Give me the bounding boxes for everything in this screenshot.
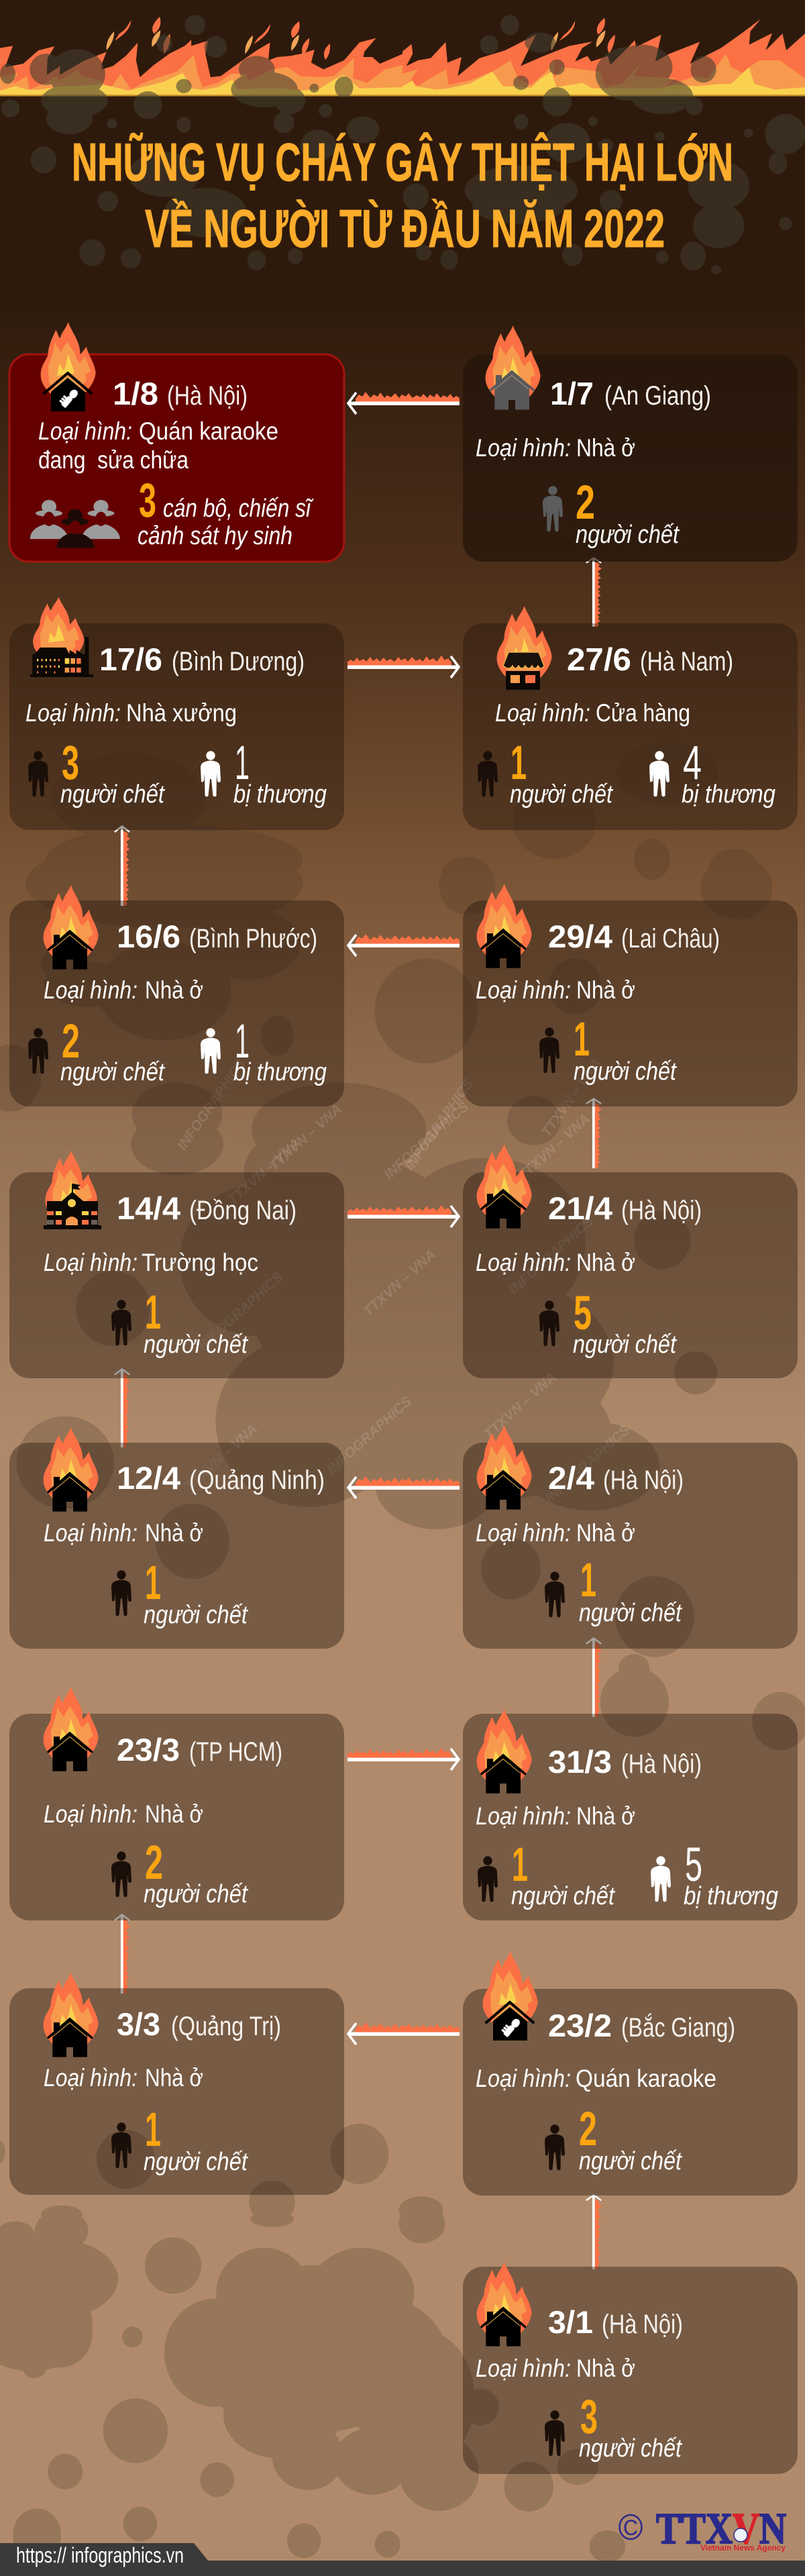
icon: burning karaoke house [41, 322, 96, 411]
location: (Hà Nội) [621, 1196, 702, 1225]
injured label: bị thương [684, 1882, 778, 1910]
icon: burning house [477, 884, 532, 968]
footer bar with url [0, 2543, 805, 2576]
type value: Quán karaoke [139, 417, 278, 445]
card background [9, 354, 344, 562]
icon: person [543, 486, 563, 531]
card background [9, 1172, 344, 1378]
panel: 23/2 Bắc Giang [463, 1951, 798, 2196]
panel: 29/4 Lai Châu [463, 884, 798, 1106]
type value: Nhà ở [576, 1802, 635, 1830]
icon: person [111, 1570, 131, 1616]
panel: 3/3 Quảng Trị [9, 1973, 344, 2195]
type value: Nhà ở [576, 2355, 635, 2382]
icon: burning factory [30, 597, 93, 677]
icon: burning house [477, 1144, 532, 1229]
icon: burning house [477, 2262, 532, 2347]
icon: person [545, 2124, 565, 2170]
icon: injured person [651, 1856, 671, 1902]
watermarks: INFOGRAPHICS [195, 1270, 286, 1353]
title [72, 132, 733, 258]
type label: Loại hình: [476, 2065, 571, 2092]
type label: Loại hình: [476, 1519, 571, 1547]
card background [9, 1714, 344, 1920]
card background [463, 1714, 798, 1920]
panel: 2/4 Hà Nội [463, 1425, 798, 1649]
type label: Loại hình: [476, 1802, 571, 1830]
type label: Loại hình: [476, 976, 571, 1004]
card background [463, 1172, 798, 1378]
panel: 21/4 Hà Nội [463, 1144, 798, 1378]
arrow: 3/1 to 23/2 [586, 2195, 602, 2269]
location: (Quảng Ninh) [189, 1465, 325, 1495]
watermarks: TTXVN – VNA [481, 1370, 559, 1442]
card background [463, 2267, 798, 2474]
watermarks: TTXVN – VNA [539, 1056, 604, 1140]
location: (Hà Nội) [621, 1749, 702, 1779]
death label line 1: cán bộ, chiến sĩ [163, 495, 314, 523]
panel: 27/6 Hà Nam [463, 606, 798, 830]
watermarks: INFOGRAPHICS [402, 1076, 476, 1174]
card background [463, 354, 798, 562]
arrow: 3/3 to 23/3 [115, 1914, 130, 1994]
death count: 2 [579, 2103, 597, 2156]
footer bar with url: https:// infographics.vn [16, 2543, 184, 2567]
type label: Loại hình: [495, 699, 590, 727]
type value: Cửa hàng [596, 699, 690, 727]
card background [9, 900, 344, 1106]
type label: Loại hình: [44, 1800, 138, 1828]
location: (Bắc Giang) [621, 2012, 735, 2043]
card background [463, 900, 798, 1106]
type value line 2: đang sửa chữa [38, 446, 189, 474]
watermarks [174, 1056, 633, 1506]
type label: Loại hình: [44, 976, 138, 1004]
injured label: bị thương [233, 780, 327, 809]
icon: dead person [478, 751, 498, 796]
icon: person [111, 2122, 131, 2168]
type value: Nhà ở [145, 1519, 203, 1547]
death count: 1 [574, 1013, 590, 1066]
icon: injured person [649, 751, 669, 796]
icon: person [111, 1851, 131, 1897]
panel: 17/6 Bình Dương [9, 597, 344, 830]
death label: người chết [511, 1882, 615, 1910]
death label line 2: cảnh sát hy sinh [138, 522, 292, 550]
icon: burning grey house [486, 325, 541, 410]
panel: 1/7 An Giang [463, 325, 798, 562]
death label: người chết [60, 1058, 165, 1086]
watermarks: INFOGRAPHICS [381, 1099, 472, 1183]
logo: TTXVN: C [623, 2516, 638, 2540]
watermarks: TTXVN – VNA [515, 1111, 593, 1184]
type value: Nhà xưởng [126, 699, 237, 727]
date: 21/4 [548, 1190, 612, 1226]
date: 23/2 [548, 2008, 612, 2043]
date: 17/6 [99, 641, 162, 677]
injured count: 5 [685, 1839, 702, 1892]
arrow: 2/4 to 12/4 [348, 1476, 460, 1498]
death label: người chết [579, 2434, 682, 2463]
watermarks: INFOGRAPHICS [542, 1423, 633, 1506]
date: 29/4 [548, 919, 612, 954]
type value: Nhà ở [145, 976, 203, 1004]
watermarks: INFOGRAPHICS [506, 1214, 596, 1298]
death label: người chết [144, 1601, 248, 1629]
card background [463, 1989, 798, 2196]
type value: Nhà ở [576, 1519, 635, 1547]
arrow: 16/6 to 17/6 [115, 826, 130, 906]
injured label: bị thương [682, 780, 775, 809]
date: 14/4 [117, 1190, 180, 1226]
icon: person [539, 1300, 559, 1346]
death count: 1 [580, 1554, 596, 1607]
type label: Loại hình: [44, 1519, 138, 1547]
icon: injured person [201, 1028, 221, 1074]
type label: Loại hình: [44, 1249, 138, 1276]
location: (Hà Nội) [602, 2310, 683, 2339]
panel: 23/3 TP HCM [9, 1687, 344, 1920]
icon: burning house [477, 1709, 532, 1794]
arrow: 14/4 to 21/4 [347, 1205, 459, 1227]
death count: 5 [574, 1287, 592, 1340]
icon: burning school [44, 1151, 101, 1229]
date: 2/4 [548, 1460, 594, 1496]
icon: dead person [478, 1856, 498, 1902]
death label: người chết [576, 521, 680, 549]
location: (An Giang) [604, 381, 711, 411]
date: 31/3 [548, 1744, 612, 1780]
logo: TTXVN: Vietnam News Agency [700, 2543, 786, 2553]
panel: 3/1 Hà Nội [463, 2262, 798, 2474]
panel: 16/6 Bình Phước [9, 885, 344, 1106]
card background [9, 1443, 344, 1649]
injured label: bị thương [233, 1058, 327, 1086]
death count: 1 [512, 1839, 528, 1892]
icon: firefighters [30, 500, 120, 548]
death count: 2 [576, 476, 595, 529]
arrow: 23/3 to 31/3 [347, 1748, 459, 1770]
arrow: 29/4 to 16/6 [348, 934, 460, 956]
type label: Loại hình: [38, 417, 132, 445]
death label: người chết [579, 1599, 682, 1627]
date: 16/6 [117, 919, 180, 954]
icon: person [545, 1572, 565, 1617]
fire band at top [0, 17, 805, 97]
injured count: 4 [683, 737, 702, 790]
date: 1/8 [113, 376, 158, 411]
icon: person [545, 2410, 565, 2456]
death count: 3 [580, 2391, 598, 2444]
watermarks: TTXVN – VNA [266, 1101, 345, 1174]
card background [463, 623, 798, 830]
arrow: 21/4 to 29/4 [586, 1098, 602, 1168]
death label: người chết [144, 1880, 248, 1908]
arrow: 17/6 to 27/6 [347, 656, 459, 678]
card background [9, 1988, 344, 2195]
icon: burning shop [497, 606, 552, 690]
type value: Quán karaoke [576, 2065, 716, 2092]
watermarks: TTXVN – VNA [360, 1247, 439, 1319]
type value: Nhà ở [576, 976, 635, 1004]
icon: person [539, 1027, 559, 1073]
death label: người chết [574, 1058, 677, 1086]
icon: burning house [44, 1973, 99, 2057]
panel: 12/4 Quảng Ninh [9, 1427, 344, 1649]
type label: Loại hình: [476, 2355, 571, 2382]
location: (Hà Nam) [640, 647, 733, 676]
injured count: 1 [235, 737, 250, 790]
icon: dead person [28, 1028, 48, 1074]
watermarks: INFOGRAPHICS [174, 1056, 249, 1153]
card background [9, 623, 344, 830]
logo: TTXVN: TTXVN [656, 2504, 786, 2553]
death label: người chết [510, 780, 613, 809]
panel: 1/8 Hà Nội [9, 322, 344, 562]
date: 12/4 [117, 1460, 180, 1496]
type label: Loại hình: [44, 2064, 138, 2092]
date: 23/3 [117, 1732, 180, 1767]
type value: Trường học [142, 1249, 258, 1276]
location: (Hà Nội) [603, 1465, 684, 1495]
type label: Loại hình: [476, 1249, 571, 1276]
type value: Nhà ở [576, 1249, 635, 1276]
icon: injured person [201, 751, 221, 796]
death count: 1 [145, 1286, 161, 1339]
date: 27/6 [567, 641, 631, 677]
watermarks: TTXVN – VNA [182, 1421, 260, 1494]
death label: người chết [144, 2148, 248, 2176]
arrow: 27/6 to 1/7 [586, 558, 602, 627]
arrow: 23/2 to 3/3 [348, 2022, 460, 2045]
date: 1/7 [550, 376, 594, 411]
death label: người chết [579, 2147, 682, 2175]
death count: 1 [145, 2104, 161, 2157]
death count: 2 [62, 1015, 80, 1068]
icon: burning house [44, 1687, 99, 1771]
arrow: 1/7 to 1/8 [348, 392, 460, 414]
death count: 1 [145, 1557, 161, 1610]
death count: 2 [145, 1837, 163, 1890]
arrow: 12/4 to 14/4 [115, 1369, 130, 1447]
type label: Loại hình: [25, 699, 121, 727]
type value: Nhà ở [576, 434, 635, 462]
date: 3/3 [117, 2006, 160, 2042]
icon: burning house [44, 885, 99, 970]
watermarks: TTXVN – VNA [225, 1135, 303, 1208]
arrow: 31/3 to 2/4 [586, 1638, 602, 1717]
panel: 31/3 Hà Nội [463, 1709, 798, 1920]
location: (Lai Châu) [621, 924, 720, 954]
icon: burning house [477, 1425, 532, 1510]
location: (Quảng Trị) [171, 2012, 281, 2041]
date: 3/1 [548, 2304, 593, 2340]
type value: Nhà ở [145, 2064, 203, 2092]
death label: người chết [144, 1331, 248, 1359]
icon: burning karaoke house [483, 1951, 538, 2041]
icon: dead person [28, 751, 48, 796]
location: (Đồng Nai) [189, 1196, 297, 1225]
location: (Bình Dương) [172, 647, 305, 676]
death count: 1 [511, 737, 527, 790]
injured count: 1 [235, 1015, 250, 1068]
card background [463, 1443, 798, 1649]
panel: 14/4 Đồng Nai [9, 1151, 344, 1378]
icon: burning house [44, 1427, 99, 1512]
location: (TP HCM) [189, 1737, 282, 1767]
death label: người chết [573, 1331, 677, 1359]
death count: 3 [139, 474, 156, 527]
location: (Hà Nội) [167, 381, 248, 411]
death label: người chết [60, 780, 165, 809]
type label: Loại hình: [476, 434, 571, 462]
icon: person [111, 1300, 131, 1345]
death count: 3 [62, 737, 79, 790]
location: (Bình Phước) [189, 924, 317, 954]
type value: Nhà ở [145, 1800, 203, 1828]
watermarks: INFOGRAPHICS [324, 1394, 415, 1478]
